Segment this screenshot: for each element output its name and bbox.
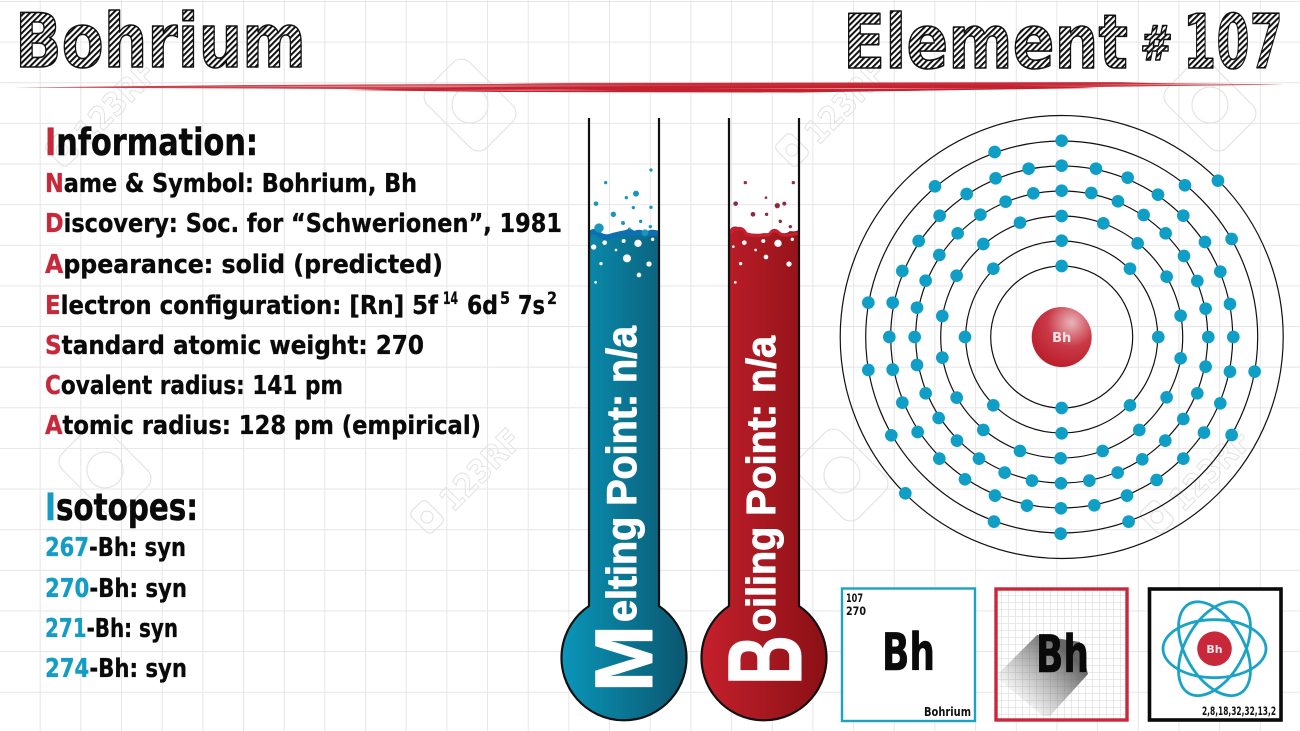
title: Element #107: Element xyxy=(843,0,1128,86)
electron configuration: Electron configuration: [Rn] 5f xyxy=(45,291,439,321)
electron configuration: 7s xyxy=(518,291,545,321)
electron configuration: 2 xyxy=(547,289,557,309)
card: periodic table tile: Bohrium xyxy=(924,705,971,719)
heading: Information: Information: xyxy=(45,121,258,164)
label: Melting Point n/a xyxy=(579,325,670,692)
card: periodic table tile: 107 xyxy=(846,591,863,605)
isotope 274: 274-Bh: syn xyxy=(45,654,187,684)
label: Boiling Point n/a: oiling Point: n/a xyxy=(738,335,784,632)
atom shell diagram xyxy=(840,116,1283,558)
label: Melting Point n/a: elting Point: n/a xyxy=(598,325,645,622)
watermarks: 123RF xyxy=(1162,421,1259,519)
melting point thermometer xyxy=(562,118,687,720)
card: periodic table tile xyxy=(842,588,975,721)
watermarks: 123RF xyxy=(432,421,529,519)
information panel xyxy=(45,121,562,441)
white bubbles xyxy=(591,238,654,284)
tube outline xyxy=(562,118,687,720)
isotopes panel xyxy=(45,486,198,684)
covalent radius: Covalent radius: 141 pm xyxy=(45,371,343,401)
card: long shadow tile xyxy=(996,589,1127,720)
red brush underline xyxy=(14,82,1285,92)
blue liquid xyxy=(562,229,687,720)
electron configuration: 5 xyxy=(500,289,510,309)
electron configuration: 14 xyxy=(443,289,458,309)
label: Melting Point n/a: M xyxy=(579,625,670,692)
label: Boiling Point n/a xyxy=(707,335,824,685)
electron shells xyxy=(840,116,1283,558)
watermarks: 123RF xyxy=(797,54,894,152)
white bubbles xyxy=(732,238,794,284)
atomic weight: Standard atomic weight: 270 xyxy=(45,331,424,361)
nucleus xyxy=(1032,307,1092,367)
card: periodic table tile: 270 xyxy=(846,604,866,618)
tube outline xyxy=(702,118,827,720)
isotope 270: 270-Bh: syn xyxy=(45,574,187,604)
isotope 267: 267-Bh: syn xyxy=(45,533,186,563)
watermarks: 123RF xyxy=(67,54,164,152)
boiling point thermometer xyxy=(702,118,827,720)
atom core: Bh xyxy=(1206,643,1223,656)
atomic radius: Atomic radius: 128 pm (empirical) xyxy=(45,411,481,441)
atom orbits icon xyxy=(1163,590,1266,708)
card: atom tile xyxy=(1150,589,1281,720)
name and symbol: Name & Symbol: Bohrium, Bh xyxy=(45,169,417,199)
red liquid xyxy=(702,226,827,720)
appearance: Appearance: solid (predicted) xyxy=(45,250,443,280)
electron configuration: 6d xyxy=(467,291,498,321)
label: Boiling Point n/a: B xyxy=(707,635,824,685)
title: Element #107: # xyxy=(1140,16,1173,72)
nucleus: Bh xyxy=(1052,331,1071,346)
discovery: Discovery: Soc. for “Schwerionen”, 1981 xyxy=(45,209,562,239)
blue bubbles xyxy=(594,168,653,236)
isotope 271: 271-Bh: syn xyxy=(45,614,178,644)
card: periodic table tile: Bh xyxy=(882,623,935,683)
electrons xyxy=(862,134,1261,540)
watermarks xyxy=(44,54,1261,535)
heading: Isotopes: Isotopes: xyxy=(45,486,198,529)
card: long shadow tile: Bh xyxy=(1036,625,1089,685)
red bubbles xyxy=(733,181,795,228)
